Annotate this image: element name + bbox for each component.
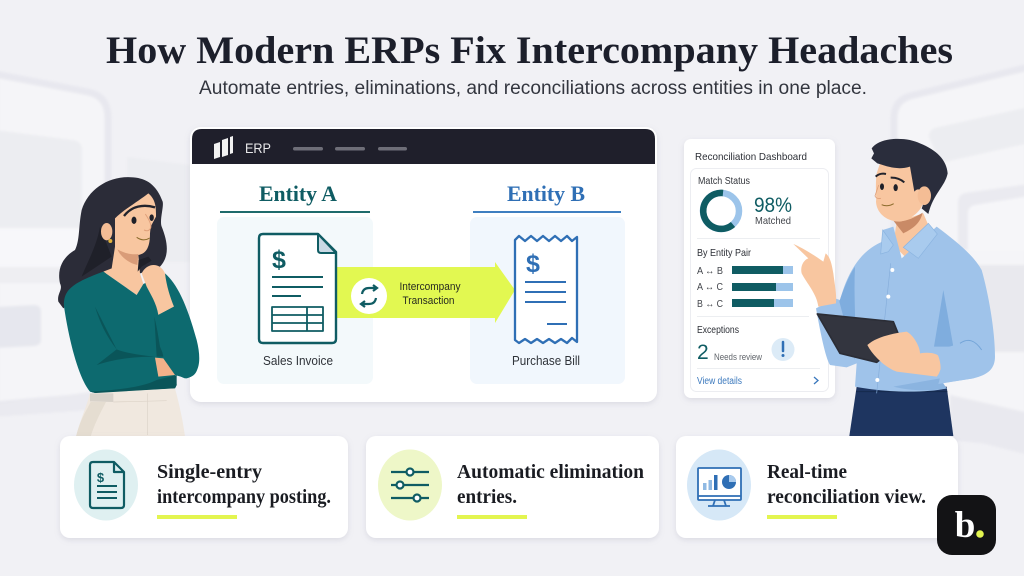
ERP header bar: ERP xyxy=(245,141,271,156)
entity B background xyxy=(470,217,625,384)
exceptions: 2 xyxy=(697,341,709,364)
match status xyxy=(698,176,792,229)
icon: monitor xyxy=(687,450,751,520)
card: automatic elimination xyxy=(366,436,659,538)
title: How Modern ERPs Fix Intercompany Headaches xyxy=(106,29,953,72)
by entity pair chart xyxy=(697,247,793,310)
panel: reconciliation dashboard xyxy=(684,139,835,398)
view details link xyxy=(697,376,818,387)
by entity pair chart: A ↔ C xyxy=(697,282,723,293)
dashboard title: Reconciliation Dashboard xyxy=(695,151,807,163)
arrow: intercompany transaction: Transaction xyxy=(402,295,454,307)
arrow: intercompany transaction xyxy=(336,262,515,323)
exceptions: Exceptions xyxy=(697,324,739,336)
card text xyxy=(767,461,926,519)
card: real-time reconciliation xyxy=(676,436,958,538)
icon: sales invoice: $ xyxy=(272,246,286,274)
heading: Entity B: Entity B xyxy=(507,181,585,206)
label: sales invoice: Sales Invoice xyxy=(263,354,333,368)
exceptions: Needs review xyxy=(714,352,762,363)
by entity pair chart: By Entity Pair xyxy=(697,247,751,259)
by entity pair chart: B ↔ C xyxy=(697,299,723,310)
subtitle: Automate entries, eliminations, and reconciliations across entities in one place. xyxy=(199,78,867,99)
card text xyxy=(457,461,644,519)
card text: Automatic elimination xyxy=(457,461,644,483)
card text: Real-time xyxy=(767,461,847,483)
label: purchase bill: Purchase Bill xyxy=(512,354,580,368)
card: single-entry posting xyxy=(60,436,348,538)
panel: ERP window xyxy=(190,127,657,402)
icon: purchase bill xyxy=(515,236,577,343)
card text: entries. xyxy=(457,486,517,508)
ERP header bar xyxy=(192,129,655,164)
icon: sales invoice xyxy=(259,234,336,343)
arrow: intercompany transaction: Intercompany xyxy=(400,281,461,293)
icon: document xyxy=(74,450,138,520)
heading: Entity A: Entity A xyxy=(259,181,337,206)
card text: Single-entry xyxy=(157,461,262,483)
match status: Match Status xyxy=(698,176,750,187)
card text: reconciliation view. xyxy=(767,486,926,508)
man illustration xyxy=(793,139,995,436)
match status: 98% xyxy=(754,194,792,217)
woman illustration xyxy=(58,177,199,437)
brand logo xyxy=(937,495,996,555)
card text: intercompany posting. xyxy=(157,486,331,508)
card text xyxy=(157,461,331,519)
brand logo: b xyxy=(955,505,975,546)
exceptions xyxy=(697,324,794,364)
icon: purchase bill: $ xyxy=(526,250,540,278)
icon: sliders xyxy=(378,450,442,520)
view details link: View details xyxy=(697,376,742,387)
icon: document: $ xyxy=(97,470,105,485)
entity A background xyxy=(217,217,373,384)
by entity pair chart: A ↔ B xyxy=(697,266,723,277)
match status: Matched xyxy=(755,215,791,227)
